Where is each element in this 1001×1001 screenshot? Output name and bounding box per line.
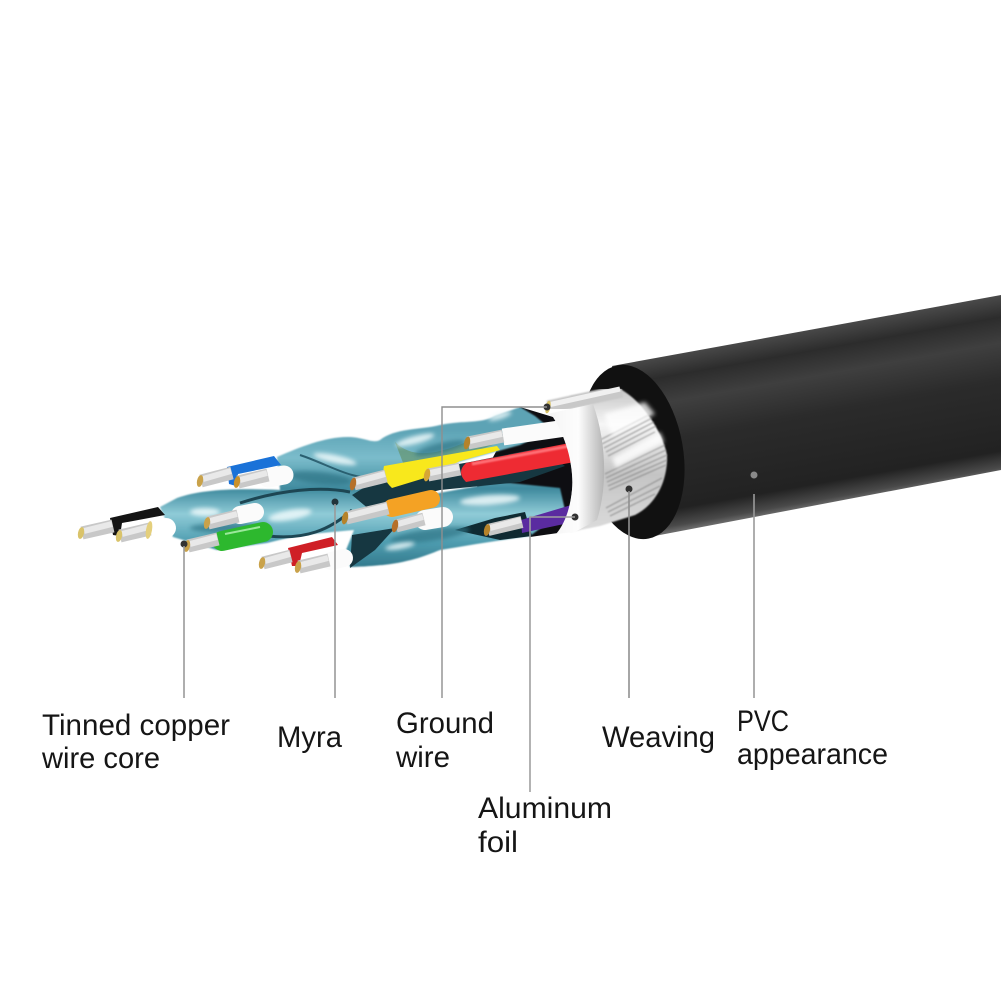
- wire: black: [77, 507, 166, 542]
- label: PVC appearance: appearance: [737, 738, 888, 771]
- label: ground wire: Ground: [396, 707, 494, 740]
- label: ground wire: [395, 707, 494, 774]
- wire: purple: [483, 503, 578, 536]
- label: aluminum foil: [478, 792, 612, 859]
- label: tinned copper wire core: Tinned copper: [42, 709, 230, 742]
- wire: white left: [203, 512, 255, 529]
- label: PVC appearance: [737, 705, 888, 771]
- label: tinned copper wire core: [41, 709, 230, 775]
- label: ground wire: wire: [395, 741, 450, 774]
- wire: orange: [341, 499, 431, 525]
- label: aluminum foil: foil: [478, 826, 518, 859]
- foil highlights: [190, 409, 520, 552]
- ground wire emerging above shield: [544, 389, 622, 414]
- label: myra: Myra: [277, 721, 342, 754]
- foil shading: [190, 437, 470, 547]
- wire: blue: [196, 456, 284, 488]
- callout line: tinned copper wire core: [180, 540, 188, 698]
- callout line: aluminum foil: [530, 514, 578, 792]
- label: weaving: Weaving: [602, 721, 715, 754]
- wire: yellow: [349, 446, 500, 491]
- aluminum foil band: [547, 404, 604, 534]
- callout line: myra: [332, 498, 338, 698]
- label: tinned copper wire core: wire core: [41, 742, 160, 775]
- PVC jacket: [568, 295, 1001, 547]
- dark gaps between foil pairs: [350, 436, 565, 568]
- myra foil bundles: [160, 407, 565, 568]
- wire: red small: [258, 537, 344, 573]
- callout line: weaving: [626, 486, 632, 698]
- label: PVC appearance: PVC: [737, 705, 789, 738]
- callout line: PVC appearance: [750, 472, 758, 698]
- braided weaving shield: [570, 388, 667, 532]
- wire: green: [183, 527, 263, 552]
- callout line: ground wire: [442, 404, 550, 698]
- wire: white with top stub: [463, 428, 566, 450]
- inner dark cavity: [470, 407, 572, 537]
- label: aluminum foil: Aluminum: [478, 792, 612, 825]
- wire: white center: [391, 517, 443, 533]
- wire: red: [423, 441, 580, 482]
